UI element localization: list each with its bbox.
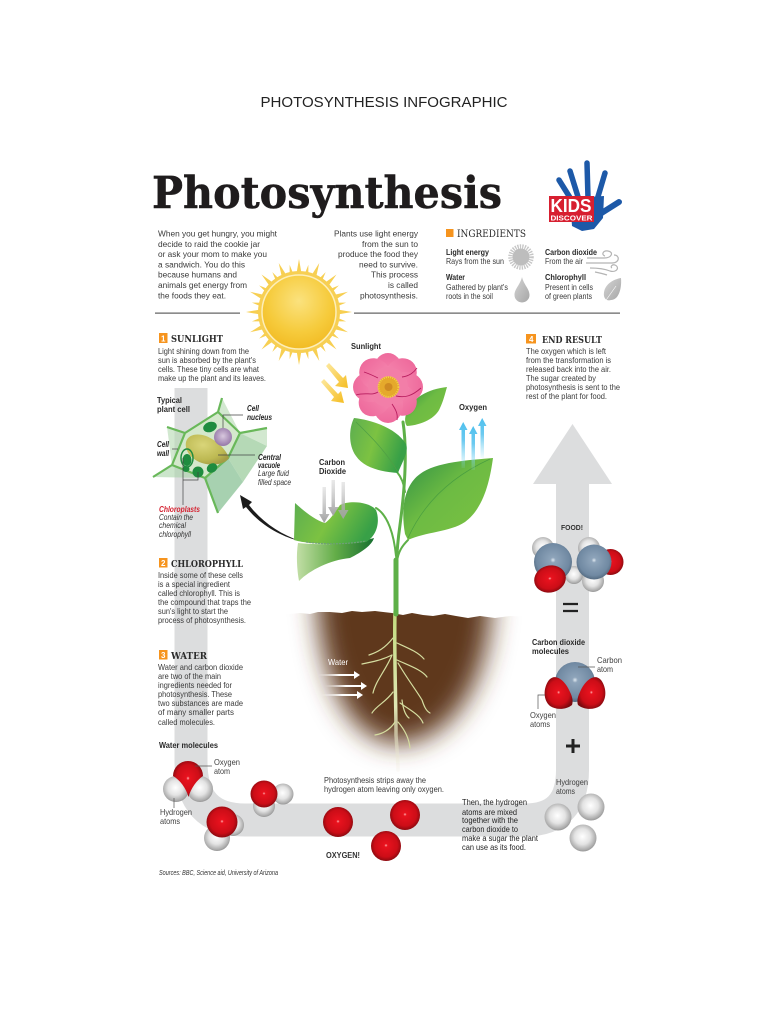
icon: gray sun xyxy=(510,246,532,268)
small upper right leaf xyxy=(405,387,447,426)
step 2: chlorophyll xyxy=(158,558,251,625)
step 1: sunlight: make up the plant and its leaves. xyxy=(158,373,266,383)
carbon dioxide molecule: Carbon xyxy=(597,655,622,665)
sources: Sources: BBC, Science aid, University of Arizona xyxy=(159,868,278,877)
label: water with arrows xyxy=(318,657,367,699)
intro text left: a sandwich. You do this xyxy=(158,259,245,269)
panel: ingredients: Rays from the sun xyxy=(446,256,504,266)
chloroplasts xyxy=(181,420,219,478)
step 2: chlorophyll: process of photosynthesis. xyxy=(158,615,246,625)
cell labels: nucleus xyxy=(247,413,272,422)
step 2: chlorophyll: is a special ingredient xyxy=(158,579,231,589)
carbon dioxide molecule: Oxygen xyxy=(530,710,556,720)
step 3: water: called molecules. xyxy=(158,717,215,727)
page heading: PHOTOSYNTHESIS INFOGRAPHIC xyxy=(260,95,508,111)
step 2: chlorophyll: called chlorophyll. This is xyxy=(158,588,240,598)
title: Photosynthesis xyxy=(152,168,502,219)
panel: ingredients: INGREDIENTS xyxy=(457,229,526,240)
intro text right: This process xyxy=(371,270,418,280)
label: carbon dioxide with arrows xyxy=(319,457,348,523)
step 2: chlorophyll: Inside some of these cells xyxy=(158,570,243,580)
text: hydrogen mixed with carbon dioxide: atoms are mixed xyxy=(462,807,517,817)
panel: ingredients: From the air xyxy=(545,256,583,266)
upper left leaf xyxy=(350,418,407,473)
panel: ingredients: Chlorophyll xyxy=(545,272,586,282)
plant roots xyxy=(362,612,430,770)
logo: Kids Discover hand xyxy=(549,163,619,231)
label: sunlight with arrows xyxy=(321,341,381,403)
step 1: sunlight: Light shining down from the xyxy=(158,346,249,356)
carbon dioxide molecule: Carbon dioxide xyxy=(532,637,585,647)
intro text left xyxy=(158,228,278,300)
label: carbon dioxide with arrows: Dioxide xyxy=(319,466,346,476)
icon: wind xyxy=(586,251,618,275)
labels: atoms xyxy=(160,816,180,826)
vacuole xyxy=(186,434,229,465)
text: photosynthesis strips hydrogen xyxy=(324,775,444,794)
intro text right: photosynthesis. xyxy=(360,290,418,300)
step 4: end result: The oxygen which is left xyxy=(526,346,607,356)
logo: Kids Discover hand: DISCOVER xyxy=(550,214,593,222)
step 4: end result: from the transformation is xyxy=(526,355,611,365)
divider rules xyxy=(155,312,620,314)
step 4: end result: END RESULT xyxy=(542,335,603,346)
step 4: end result: 4 xyxy=(529,335,534,344)
diagram: plant cell xyxy=(153,395,291,539)
cell labels: wall xyxy=(157,449,170,458)
molecule 2 xyxy=(250,780,294,817)
panel: ingredients: Gathered by plant's xyxy=(446,282,508,292)
cell walls xyxy=(153,398,267,513)
cell labels: Central xyxy=(258,453,282,462)
carbon dioxide molecule xyxy=(530,637,622,729)
intro text left: animals get energy from xyxy=(158,280,247,290)
cell labels: Contain the xyxy=(159,513,193,522)
step 3: water: Water and carbon dioxide xyxy=(158,662,243,672)
leader lines xyxy=(172,415,255,505)
cell labels: Cell xyxy=(247,404,260,413)
text: hydrogen mixed with carbon dioxide xyxy=(462,797,539,852)
text: hydrogen mixed with carbon dioxide: carbon dioxide to xyxy=(462,824,518,834)
step 3: water: are two of the main xyxy=(158,671,221,681)
label: water with arrows: Water xyxy=(328,657,348,667)
labels: Oxygen xyxy=(214,757,240,767)
step 1: sunlight xyxy=(158,333,266,383)
intro text left: decide to raid the cookie jar xyxy=(158,239,260,249)
intro text right: from the sun to xyxy=(362,239,418,249)
labels xyxy=(160,757,240,826)
intro text right xyxy=(334,228,419,300)
nucleus xyxy=(214,428,232,446)
hydrogen atoms: Hydrogen xyxy=(556,777,588,787)
food molecules: FOOD! xyxy=(561,523,583,532)
plus sign xyxy=(566,739,580,753)
oxygen atoms xyxy=(323,800,420,861)
sugar molecule right xyxy=(576,537,624,592)
panel: ingredients xyxy=(446,229,621,303)
step 3: water: ingredients needed for xyxy=(158,680,232,690)
equals sign xyxy=(563,604,578,611)
text: hydrogen mixed with carbon dioxide: together with the xyxy=(462,815,518,825)
cell labels: vacuole xyxy=(258,461,280,470)
icon: leaf xyxy=(604,278,621,303)
step 3: water xyxy=(158,650,243,727)
panel: ingredients: Water xyxy=(446,272,466,282)
intro text left: the foods they eat. xyxy=(158,290,226,300)
plant xyxy=(294,352,493,614)
intro text right: produce the food they xyxy=(338,249,419,259)
step 2: chlorophyll: 2 xyxy=(161,559,166,568)
label: sunlight with arrows: Sunlight xyxy=(351,341,381,351)
text: hydrogen mixed with carbon dioxide: can use as its food. xyxy=(462,842,526,852)
step 4: end result: rest of the plant for food. xyxy=(526,391,607,401)
step 4: end result xyxy=(526,334,620,401)
panel: ingredients: Light energy xyxy=(446,247,489,257)
cell labels: plant cell xyxy=(157,404,190,414)
text: hydrogen mixed with carbon dioxide: make a sugar the plant xyxy=(462,833,539,843)
water molecules xyxy=(159,740,294,851)
step 1: sunlight: 1 xyxy=(161,334,166,344)
text: hydrogen mixed with carbon dioxide: Then, the hydrogen xyxy=(462,797,527,807)
step 3: water: two substances are made xyxy=(158,698,243,708)
intro text left: When you get hungry, you might xyxy=(158,228,278,238)
intro text right: is called xyxy=(388,280,418,290)
label: oxygen with arrows: Oxygen xyxy=(459,402,487,412)
food molecules xyxy=(531,523,624,596)
hydrogen atoms: atoms xyxy=(556,786,575,796)
step 3: water: 3 xyxy=(161,651,166,660)
process path arrow xyxy=(191,388,612,820)
labels: atom xyxy=(214,766,230,776)
panel: ingredients: Present in cells xyxy=(545,282,593,292)
carbon dioxide molecule: molecules xyxy=(532,646,569,656)
step 4: end result: The sugar created by xyxy=(526,373,597,383)
intro text right: Plants use light energy xyxy=(334,228,419,238)
cell faces xyxy=(153,398,267,513)
step 3: water: photosynthesis. These xyxy=(158,689,232,699)
panel: ingredients: of green plants xyxy=(545,291,592,301)
logo: Kids Discover hand: KIDS xyxy=(550,196,592,216)
label: carbon dioxide with arrows: Carbon xyxy=(319,457,345,467)
molecule 3 xyxy=(204,806,244,851)
labels: Hydrogen xyxy=(160,807,192,817)
step 3: water: of many smaller parts xyxy=(158,707,234,717)
leader lines xyxy=(174,766,212,808)
cell labels xyxy=(157,395,291,539)
stem xyxy=(376,422,408,614)
panel: ingredients: Carbon dioxide xyxy=(545,247,597,257)
cell labels: chlorophyll xyxy=(159,530,191,539)
step 2: chlorophyll: the compound that traps the xyxy=(158,597,251,607)
cell labels: chemical xyxy=(159,521,186,530)
text: photosynthesis strips hydrogen: Photosynthesis strips away the xyxy=(324,775,426,785)
intro text left: or ask your mom to make you xyxy=(158,249,267,259)
oxygen atoms: OXYGEN! xyxy=(326,850,360,860)
step 1: sunlight: cells. These tiny cells are what xyxy=(158,364,260,374)
step 4: end result: released back into the air. xyxy=(526,364,611,374)
cell labels: filled space xyxy=(258,478,291,487)
carbon dioxide molecule: atom xyxy=(597,664,613,674)
cell labels: Typical xyxy=(157,395,182,405)
carbon dioxide molecule: atoms xyxy=(530,719,550,729)
large right leaf xyxy=(403,458,493,540)
lower left leaf xyxy=(294,502,378,581)
flower xyxy=(352,352,423,423)
hydrogen atoms xyxy=(544,777,604,852)
icon: water drop xyxy=(514,277,530,303)
arrow: leaf to cell xyxy=(240,495,300,541)
step 4: end result: photosynthesis is sent to the xyxy=(526,382,620,392)
icon: sun xyxy=(246,259,352,365)
panel: ingredients: roots in the soil xyxy=(446,291,493,301)
label: oxygen with arrows xyxy=(459,402,487,470)
step 1: sunlight: SUNLIGHT xyxy=(171,334,224,345)
step 2: chlorophyll: CHLOROPHYLL xyxy=(171,559,243,570)
sugar molecule left xyxy=(531,537,583,596)
intro text right: need to survive. xyxy=(359,259,418,269)
cell labels: Large fluid xyxy=(258,469,289,478)
step 2: chlorophyll: sun's light to start the xyxy=(158,606,228,616)
text: photosynthesis strips hydrogen: hydrogen atom leaving only oxygen. xyxy=(324,784,444,794)
soil xyxy=(316,585,492,744)
cell labels: Cell xyxy=(157,440,170,449)
cell labels: Chloroplasts xyxy=(159,505,200,514)
step 3: water: WATER xyxy=(170,651,208,662)
step 1: sunlight: sun is absorbed by the plant's xyxy=(158,355,256,365)
water molecules: Water molecules xyxy=(159,740,218,750)
intro text left: because humans and xyxy=(158,270,237,280)
molecule 1 xyxy=(163,761,213,802)
